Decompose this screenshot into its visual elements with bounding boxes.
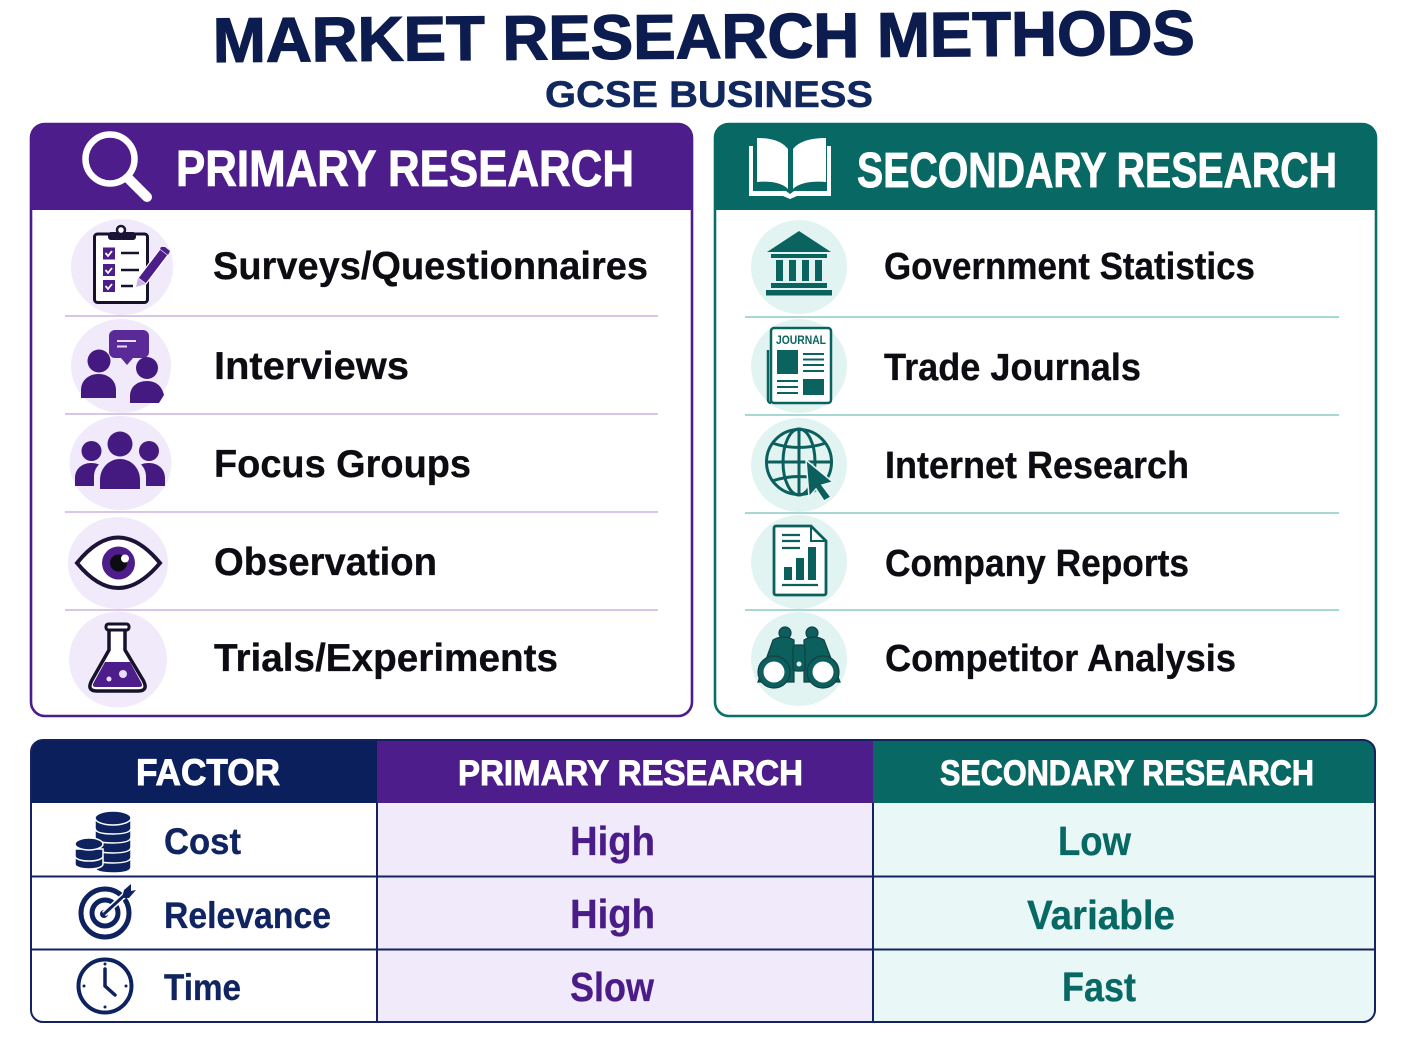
internet label: Internet Research: [885, 445, 1189, 487]
secondary time value: Fast: [1062, 964, 1136, 1010]
primary relevance value: High: [570, 891, 655, 937]
row: surveys: [71, 219, 173, 315]
row: journal icon: JOURNAL: [776, 335, 826, 347]
row: journal icon: [751, 319, 847, 413]
comparison table: [31, 740, 1375, 1022]
primary value cells: [377, 803, 873, 1022]
secondary header band: [714, 123, 1377, 210]
row: observation icon: [68, 517, 168, 609]
icon: clock: [78, 960, 132, 1012]
primary header band: [30, 123, 693, 210]
panel: secondary research: [714, 123, 1377, 716]
secondary relevance value: Variable: [1027, 892, 1175, 938]
title: MARKET RESEARCH METHODS: [213, 0, 1195, 76]
primary header text: PRIMARY RESEARCH: [458, 754, 803, 793]
cost label: Cost: [164, 821, 241, 862]
observation label: Observation: [214, 541, 437, 584]
icon: target: [81, 884, 136, 937]
row: interviews icon: [71, 319, 171, 413]
trials label: Trials/Experiments: [214, 637, 558, 680]
primary column header: [377, 740, 873, 803]
row: company reports icon: [751, 515, 847, 609]
interviews label: Interviews: [214, 345, 409, 388]
primary cost value: High: [570, 818, 655, 864]
secondary header text: SECONDARY RESEARCH: [940, 754, 1314, 793]
row: internet icon: [751, 418, 847, 512]
secondary value cells: [873, 803, 1375, 1022]
row: focus groups icon: [70, 416, 172, 510]
time label: Time: [164, 967, 241, 1008]
icon: magnifying glass: [86, 134, 147, 197]
factor header text: FACTOR: [136, 752, 280, 793]
row: government icon: [751, 220, 847, 314]
row: binoculars icon: [751, 612, 847, 706]
secondary column header: [873, 740, 1375, 803]
government label: Government Statistics: [884, 246, 1255, 288]
focus groups label: Focus Groups: [214, 443, 471, 486]
primary heading: PRIMARY RESEARCH: [176, 140, 634, 197]
subtitle: GCSE BUSINESS: [545, 74, 873, 115]
relevance label: Relevance: [164, 895, 331, 936]
primary time value: Slow: [570, 964, 654, 1010]
panel: primary research: [30, 123, 693, 716]
row: trials icon: [69, 612, 167, 708]
trade journals label: Trade Journals: [884, 347, 1141, 389]
icon: coins: [75, 811, 131, 873]
survey label: Surveys/Questionnaires: [213, 245, 648, 288]
company reports label: Company Reports: [885, 543, 1189, 585]
icon: clipboard with pencil: [94, 226, 170, 302]
icon: open book: [749, 138, 831, 199]
factor column header: [31, 740, 377, 803]
secondary cost value: Low: [1058, 818, 1131, 864]
competitor label: Competitor Analysis: [885, 638, 1236, 680]
